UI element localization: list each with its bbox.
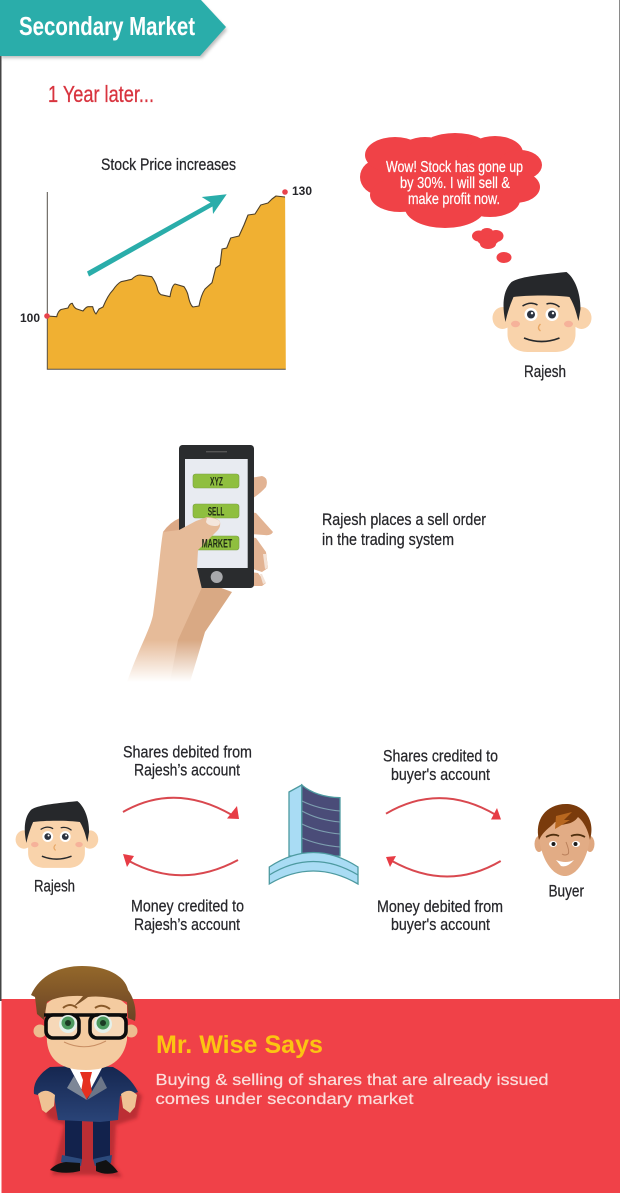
phone [179,445,254,588]
label: shares credited: buyer's account [391,765,490,784]
label: money credited: Rajesh’s account [134,915,240,934]
heading: Mr. Wise Says: Mr. Wise Says [156,1031,323,1059]
label: money debited: buyer's account [391,915,490,934]
character: Rajesh large [492,272,592,352]
button labels: SELL [208,504,224,518]
start point 100: 100 [20,311,40,325]
chart title: Stock Price increases [101,155,236,174]
fingers behind phone [250,476,273,586]
text: sell order: in the trading system [322,530,454,549]
legs and shoes [50,1118,118,1174]
button: MARKET [193,536,239,550]
button: XYZ: XYZ [210,474,223,488]
illustration: hand holding phone [127,445,273,682]
hand back [150,580,232,682]
arrow: money to Rajesh [123,854,238,875]
character: Buyer [534,804,594,876]
hands [38,1091,137,1113]
suit [34,1066,138,1122]
button labels: MARKET [202,536,233,550]
label: money credited [131,897,244,934]
label: Rajesh: Rajesh [524,362,566,381]
character: Rajesh small [16,801,98,868]
text: sell order: Rajesh places a sell order [322,510,486,529]
label: money debited: Money debited from [377,897,503,916]
text: Mr. Wise body [156,1072,548,1108]
bubble text: Wow! Stock has gone up [386,159,523,176]
label: Rajesh small: Rajesh [34,877,75,896]
cloud puffs [472,228,512,263]
label: money credited: Money credited to [131,897,244,916]
end point 130 [282,184,312,198]
section banner: Secondary Market [0,0,227,58]
bubble text [386,159,523,208]
button: XYZ [193,474,239,488]
bubble text: make profit now. [408,191,500,208]
bubble text: by 30%. I will sell & [400,175,511,192]
label: shares credited: Shares credited to [383,747,498,766]
label: shares debited: Rajesh’s account [134,761,240,780]
arrow: money to exchange [386,856,501,876]
start point 100 [20,311,50,325]
arrow: upward trend [87,194,227,276]
icon: stock exchange building [269,785,358,884]
chart area [47,196,286,369]
text: Mr. Wise body: comes under secondary market [156,1091,414,1108]
panel: Mr. Wise Says [2,999,620,1193]
shadow [40,1072,142,1177]
head [31,966,138,1070]
label: Buyer: Buyer [548,882,584,901]
arrow: shares to buyer [386,798,501,820]
glasses [44,1015,127,1038]
thought bubble [360,133,542,263]
end point 130: 130 [292,184,312,198]
button labels [202,504,233,550]
section banner: Secondary Market: Secondary Market [19,11,195,41]
heading: 1 Year later: 1 Year later... [48,81,154,107]
arrow: shares to exchange [123,798,239,819]
button: SELL [193,504,239,518]
text: sell order [322,510,486,549]
label: shares debited: Shares debited from [123,743,252,762]
character: Mr. Wise [31,966,142,1177]
label: shares credited [383,747,498,784]
text: Mr. Wise body: Buying & selling of shares that are already issued [156,1072,548,1089]
label: money debited [377,897,503,934]
label: shares debited [123,743,252,780]
palm and thumb [127,517,220,682]
area chart: stock price increases [20,155,312,369]
